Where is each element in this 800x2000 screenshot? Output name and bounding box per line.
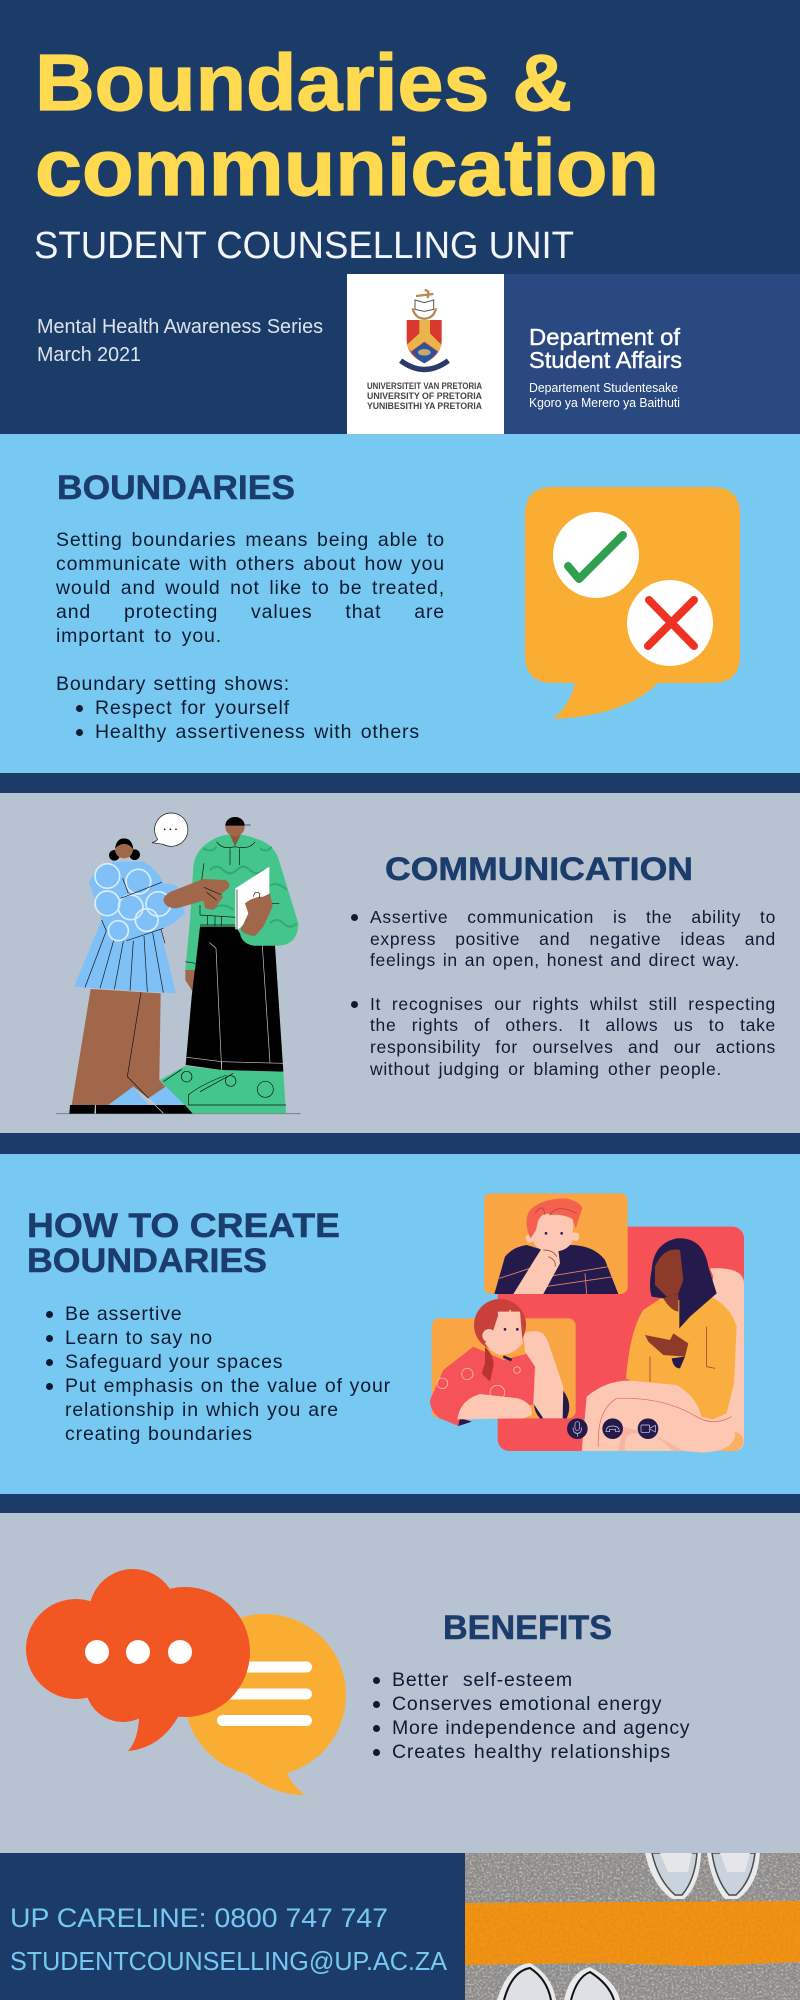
man sweater	[185, 834, 298, 970]
woman skirt	[74, 920, 176, 993]
text: communication bullets: express positive and negative ideas and	[370, 929, 776, 949]
panel: department of student affairs: Departement Studentesake	[529, 380, 678, 395]
heading: communication: COMMUNICATION	[385, 851, 693, 887]
illustration: two people talking	[56, 812, 301, 1114]
woman shoes	[108, 1087, 185, 1105]
text: how to list: Put emphasis on the value of your	[65, 1375, 391, 1397]
illustration: video call	[430, 1193, 744, 1453]
contact details: UP CARELINE: 0800 747 747	[10, 1903, 388, 1933]
text: boundaries explanation: and protecting values that are	[56, 601, 445, 623]
series and date	[37, 316, 323, 366]
heading: boundaries: BOUNDARIES	[57, 469, 295, 507]
text: benefits list: Better self-esteem	[392, 1669, 573, 1691]
man hand and pants	[185, 970, 195, 992]
text: boundaries explanation: Healthy assertiveness with others	[95, 721, 420, 743]
title: communication	[35, 123, 659, 212]
text: communication bullets	[351, 907, 776, 1079]
text: boundaries explanation: would and would not like to be treated,	[56, 577, 445, 599]
text: how to list: Be assertive	[65, 1303, 182, 1325]
text: how to list	[46, 1303, 391, 1445]
title: Boundaries &	[35, 38, 572, 127]
heading: how to create boundaries: BOUNDARIES	[27, 1242, 267, 1280]
text: how to list: creating boundaries	[65, 1423, 253, 1445]
panel: communication	[0, 793, 800, 1133]
subtitle: STUDENT COUNSELLING UNIT	[34, 225, 574, 267]
woman legs	[72, 989, 167, 1105]
panel: footer	[0, 1853, 800, 2000]
man in top tile	[494, 1245, 618, 1294]
text: benefits list	[373, 1669, 690, 1763]
photo: shoes either side of an orange line	[465, 1853, 800, 2000]
text: boundaries explanation: Setting boundaries means being able to	[56, 529, 445, 551]
text: boundaries explanation: Boundary setting shows:	[56, 673, 290, 695]
text: how to list: Safeguard your spaces	[65, 1351, 283, 1373]
text: communication bullets: feelings in an open, honest and direct way.	[370, 950, 740, 970]
text: benefits list: Conserves emotional energy	[392, 1693, 662, 1715]
logo text: YUNIBESITHI YA PRETORIA	[367, 401, 482, 411]
logo text: UNIVERSITEIT VAN PRETORIA	[367, 381, 482, 391]
panel: department of student affairs	[504, 274, 800, 434]
panel: department of student affairs: Department of	[529, 324, 681, 350]
heading: how to create boundaries: HOW TO CREATE	[27, 1207, 340, 1245]
text: communication bullets: responsibility for ourselves and our actions	[370, 1037, 776, 1057]
series and date: Mental Health Awareness Series	[37, 316, 323, 338]
text: boundaries explanation: communicate with others about how you	[56, 553, 445, 575]
text: boundaries explanation	[56, 529, 445, 743]
girl in lower tile	[430, 1347, 538, 1426]
shoes below the line	[497, 1963, 556, 2000]
logo text	[367, 381, 482, 411]
logo text: UNIVERSITY OF PRETORIA	[367, 391, 482, 401]
panel: university logo	[347, 274, 504, 434]
text: how to list: Learn to say no	[65, 1327, 213, 1349]
series and date: March 2021	[37, 344, 141, 366]
text: benefits list: More independence and agency	[392, 1717, 690, 1739]
woman head	[109, 850, 120, 861]
contact details	[10, 1903, 448, 1976]
heading: benefits: BENEFITS	[443, 1609, 612, 1647]
woman arm	[163, 879, 229, 910]
text: communication bullets: without judging or blaming other people.	[370, 1059, 722, 1079]
shoes above the line	[645, 1853, 701, 1899]
call buttons	[567, 1418, 588, 1439]
title	[35, 38, 659, 212]
woman on the right	[677, 1268, 744, 1451]
speech bubble	[152, 813, 188, 846]
woman top	[89, 862, 185, 941]
text: how to list: relationship in which you are	[65, 1399, 339, 1421]
panel: benefits	[0, 1513, 800, 1853]
panel: header	[0, 0, 800, 434]
icon: speech bubble with tick and cross	[525, 487, 740, 719]
text: boundaries explanation: Respect for yourself	[95, 697, 290, 719]
man shoes	[160, 1066, 286, 1113]
text: boundaries explanation: important to you.	[56, 625, 222, 647]
panel: department of student affairs: Student Affairs	[529, 347, 682, 373]
text: benefits list: Creates healthy relationships	[392, 1741, 671, 1763]
man head	[230, 835, 241, 847]
panel: department of student affairs: Kgoro ya Merero ya Baithuti	[529, 395, 680, 410]
contact details: STUDENTCOUNSELLING@UP.AC.ZA	[10, 1946, 448, 1976]
text: communication bullets: It recognises our rights whilst still respecting	[370, 994, 776, 1014]
book	[235, 867, 269, 929]
heading: how to create boundaries	[27, 1207, 340, 1280]
icon: crest	[401, 290, 448, 369]
text: communication bullets: the rights of others. It allows us to take	[370, 1015, 776, 1035]
panel: boundaries	[0, 434, 800, 773]
panel: how to create boundaries	[0, 1154, 800, 1494]
icon: two speech bubbles	[26, 1569, 346, 1795]
text: communication bullets: Assertive communication is the ability to	[370, 907, 776, 927]
